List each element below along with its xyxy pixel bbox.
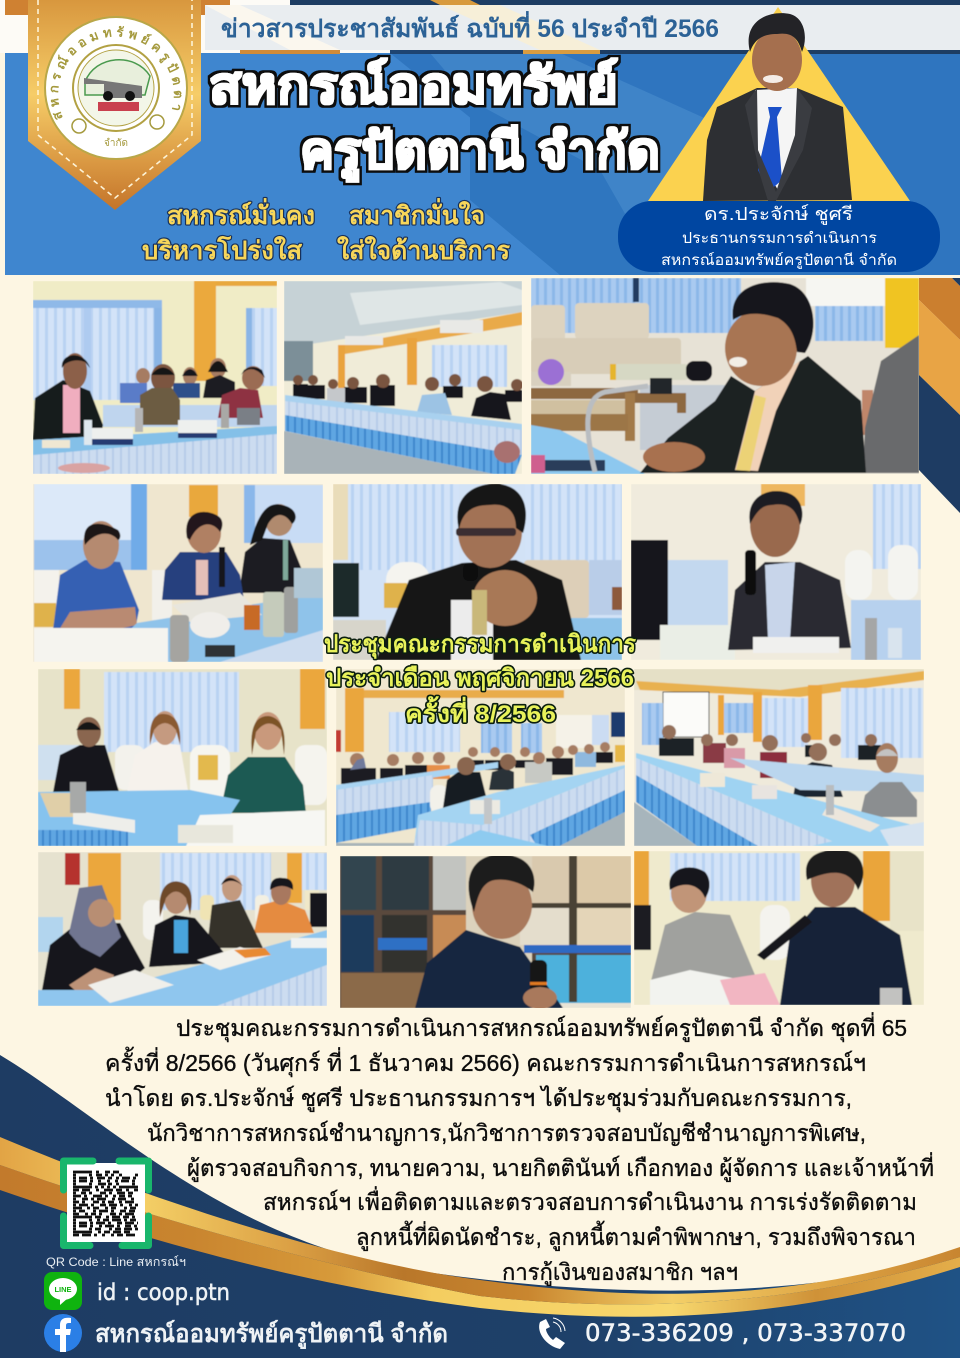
- meeting caption overlay: [324, 631, 636, 728]
- body paragraph: นำโดย ดร.ประจักษ์ ชูศรี ประธานกรรมการฯ ได้ประชุมร่วมกับคณะกรรมการ,: [105, 1085, 852, 1112]
- body paragraph: การกู้เงินของสมาชิก ฯลฯ: [502, 1259, 738, 1286]
- chairman name plate: ประธานกรรมการดำเนินการ: [682, 230, 877, 247]
- slogans: สหกรณ์มั่นคง: [167, 198, 315, 230]
- photo 12: two members with microphone: [634, 851, 924, 1005]
- line id: id : coop.ptn: [97, 1280, 230, 1306]
- chairman name plate: [618, 201, 940, 272]
- icon: LINE: [44, 1272, 82, 1310]
- icon: facebook: [44, 1314, 82, 1352]
- chairman portrait: [648, 7, 910, 201]
- photo 6: man in suit speaking: [631, 484, 921, 660]
- body paragraph: สหกรณ์ฯ เพื่อติดตามและตรวจสอบการดำเนินงาน การเร่งรัดติดตาม: [263, 1186, 917, 1215]
- slogans: สมาชิกมั่นใจ: [349, 198, 485, 230]
- body paragraph: นักวิชาการสหกรณ์ชำนาญการ,นักวิชาการตรวจสอบบัญชีชำนาญการพิเศษ,: [147, 1120, 866, 1146]
- photo 10: four women at table: [38, 852, 327, 1006]
- QR caption: QR Code : Line สหกรณ์ฯ: [46, 1255, 186, 1269]
- meeting caption overlay: ประชุมคณะกรรมการดำเนินการ: [324, 631, 636, 660]
- ribbon badge with logo: [28, 0, 201, 210]
- body paragraph: [105, 1012, 934, 1286]
- body paragraph: ลูกหนี้ที่ผิดนัดชำระ, ลูกหนี้ตามคำพิพากษา, รวมถึงพิจารณา: [356, 1221, 916, 1251]
- QR code: [64, 1161, 148, 1246]
- photo 2: long meeting table: [284, 281, 522, 474]
- chairman name plate: สหกรณ์ออมทรัพย์ครูปัตตานี จำกัด: [661, 252, 897, 269]
- bottom swoosh background: [0, 1055, 960, 1358]
- right side decoration: [919, 278, 960, 513]
- photo 7: man and two women smiling: [38, 669, 327, 846]
- meeting caption overlay: ครั้งที่ 8/2566: [405, 695, 556, 728]
- slogans: ใส่ใจด้านบริการ: [337, 235, 511, 265]
- photo 4: three women at table: [33, 484, 323, 662]
- photo 11: young man speaking: [340, 856, 631, 1008]
- meeting caption overlay: ประจำเดือน พฤศจิกายน 2566: [326, 665, 634, 692]
- facebook page name: สหกรณ์ออมทรัพย์ครูปัตตานี จำกัด: [95, 1319, 448, 1350]
- icon: telephone: [539, 1318, 565, 1349]
- phone numbers: 073-336209 , 073-337070: [585, 1319, 906, 1347]
- photo 9: committee along long table: [634, 669, 924, 846]
- body paragraph: ประชุมคณะกรรมการดำเนินการสหกรณ์ออมทรัพย์ครูปัตตานี จำกัด ชุดที่ 65: [176, 1012, 907, 1042]
- header banner: [0, 0, 960, 275]
- title: ครูปัตตานี จำกัด: [300, 123, 660, 182]
- chairman name plate: ดร.ประจักษ์ ชูศรี: [704, 204, 853, 225]
- logo seal: จำกัด: [104, 138, 128, 149]
- title: สหกรณ์ออมทรัพย์: [209, 58, 618, 114]
- body paragraph: ผู้ตรวจสอบกิจการ, ทนายความ, นายกิตตินันท์ เกือกทอง ผู้จัดการ และเจ้าหน้าที่: [187, 1152, 934, 1182]
- photo 8: meeting room overview: [336, 669, 625, 846]
- title: [209, 58, 660, 182]
- newsletter heading: ข่าวสารประชาสัมพันธ์ ฉบับที่ 56 ประจำปี 2566: [221, 11, 719, 43]
- body paragraph: ครั้งที่ 8/2566 (วันศุกร์ ที่ 1 ธันวาคม 2566) คณะกรรมการดำเนินการสหกรณ์ฯ: [105, 1047, 866, 1077]
- photo 1: committee members at table: [33, 281, 277, 474]
- icon: LINE: LINE: [54, 1285, 72, 1294]
- logo seal: [44, 16, 188, 160]
- photo 3: chairman laughing at microphone: [531, 278, 919, 474]
- photo 5: man in glasses with microphone: [333, 484, 622, 660]
- slogans: บริหารโปร่งใส: [142, 235, 303, 265]
- slogans: [142, 198, 511, 265]
